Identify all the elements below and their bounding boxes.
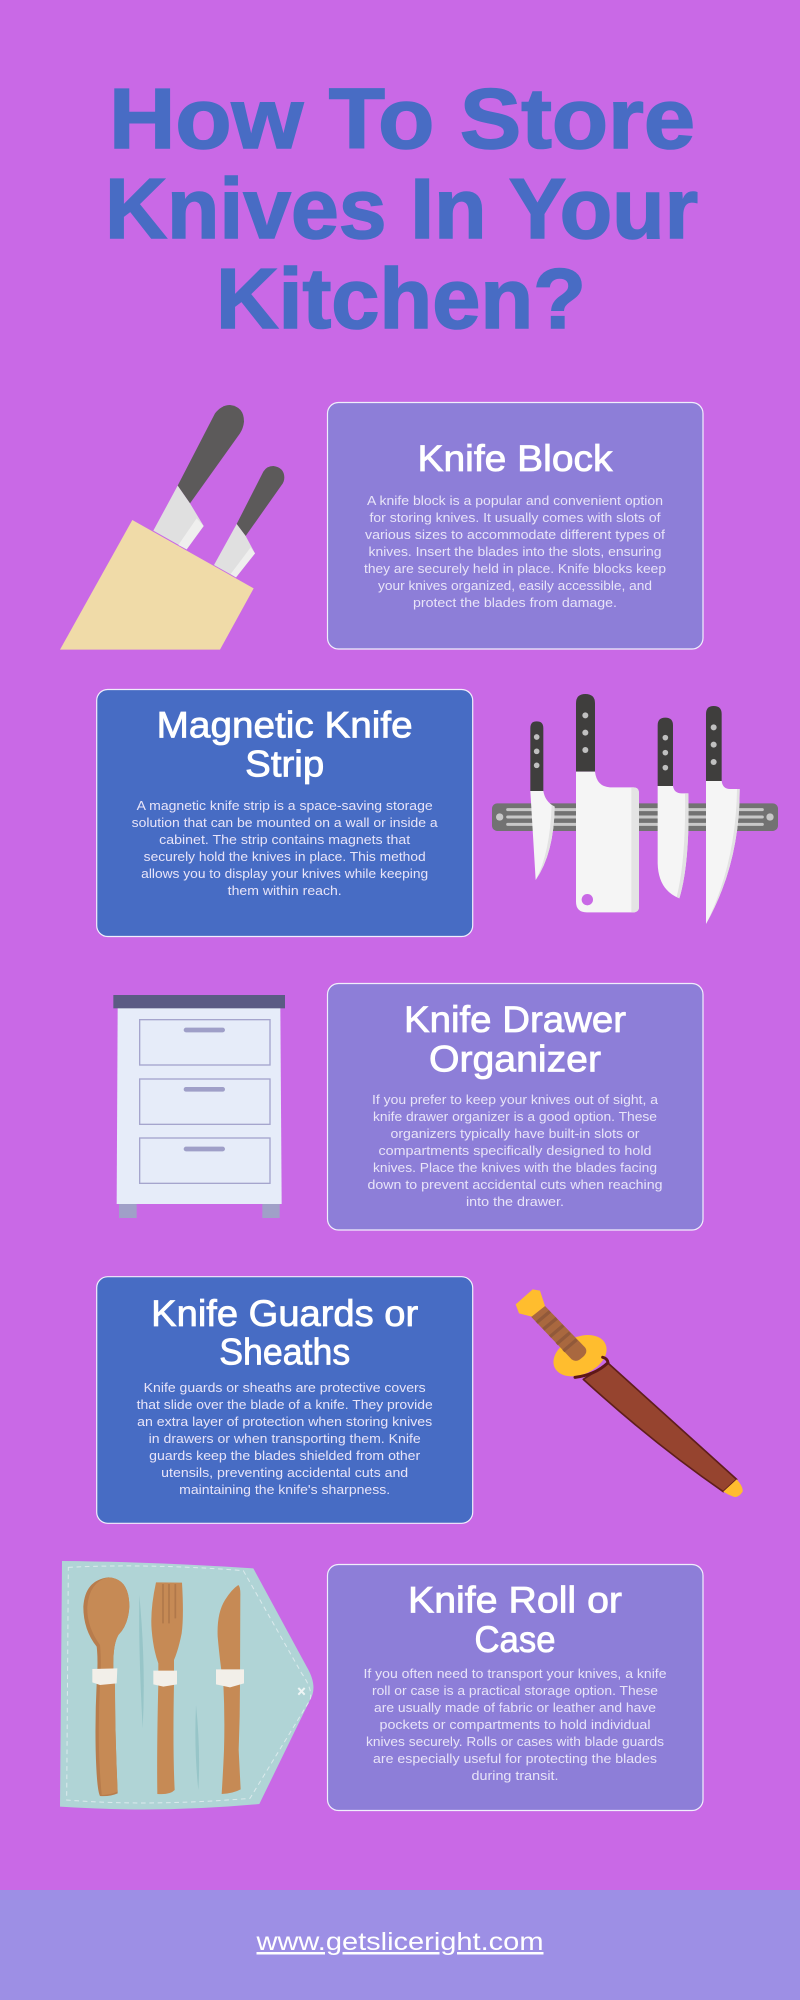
title: Kitchen? [216,252,586,347]
panel: knife guards or sheaths [97,1277,473,1523]
heading: knife block: Knife Block [418,438,613,479]
heading: knife roll or case: Case [474,1619,556,1660]
text: knife roll or case: pockets or compartments to hold individual [380,1717,651,1732]
text: magnetic knife strip: securely hold the knives in place. This method [144,849,426,864]
title: Knives In Your [105,162,698,257]
text: knife drawer organizer: into the drawer. [466,1194,564,1209]
heading: knife roll or case: Knife Roll or [408,1580,622,1621]
footer link: www.getsliceright.com [255,1928,543,1956]
text: knife guards or sheaths [137,1380,433,1497]
text: knife roll or case: are especially useful for protecting the blades [373,1751,658,1766]
text: knife block: various sizes to accommodate different types of [365,527,665,542]
text: knife drawer organizer: If you prefer to keep your knives out of sight, a [372,1092,659,1107]
text: magnetic knife strip [132,798,439,898]
heading: knife guards or sheaths: Sheaths [219,1332,350,1373]
text: magnetic knife strip: cabinet. The strip contains magnets that [159,832,411,847]
text: knife guards or sheaths: utensils, preventing accidental cuts and [161,1465,408,1480]
text: knife roll or case [364,1666,666,1783]
title: How To Store [109,72,695,167]
title [105,72,698,347]
text: magnetic knife strip: solution that can be mounted on a wall or inside a [132,815,439,830]
panel: knife roll or case [328,1564,703,1810]
icon: knife block [60,405,284,650]
text: knife roll or case: roll or case is a practical storage option. These [372,1683,658,1698]
text: knife drawer organizer: compartments specifically designed to hold [378,1143,652,1158]
text: knife drawer organizer: knife drawer organizer is a good option. These [373,1109,657,1124]
footer band [0,1890,800,2000]
text: knife block: for storing knives. It usually comes with slots of [370,510,661,525]
icon: sheathed dagger [516,1289,743,1497]
text: knife block: your knives organized, easily accessible, and [378,578,652,593]
text: magnetic knife strip: them within reach. [228,883,342,898]
icon: magnetic strip with knives [492,694,778,924]
text: knife roll or case: during transit. [472,1768,558,1783]
text: knife roll or case: are usually made of fabric or leather and have [374,1700,656,1715]
text: knife drawer organizer: organizers typically have built-in slots or [390,1126,640,1141]
text: knife guards or sheaths: an extra layer of protection when storing knives [137,1414,433,1429]
text: knife block [364,493,666,610]
text: knife guards or sheaths: in drawers or when transporting them. Knife [149,1431,421,1446]
text: knife roll or case: knives securely. Rolls or cases with blade guards [366,1734,665,1749]
icon: drawer cabinet [113,995,285,1218]
text: magnetic knife strip: allows you to display your knives while keeping [141,866,428,881]
text: magnetic knife strip: A magnetic knife strip is a space-saving storage [137,798,433,813]
heading: magnetic knife strip: Magnetic Knife [157,705,413,746]
text: knife drawer organizer [368,1092,662,1209]
text: knife block: they are securely held in place. Knife blocks keep [364,561,666,576]
text: knife guards or sheaths: Knife guards or sheaths are protective covers [144,1380,426,1395]
heading: knife drawer organizer: Organizer [429,1038,601,1079]
panel: knife block [328,402,703,649]
text: knife block: protect the blades from damage. [413,595,617,610]
text: knife block: knives. Insert the blades into the slots, ensuring [368,544,662,559]
text: knife guards or sheaths: that slide over the blade of a knife. They provide [137,1397,433,1412]
text: knife drawer organizer: down to prevent accidental cuts when reaching [368,1177,662,1192]
heading: knife guards or sheaths: Knife Guards or [151,1293,418,1334]
text: knife guards or sheaths: maintaining the knife's sharpness. [179,1482,390,1497]
panel: knife drawer organizer [328,984,703,1230]
text: knife drawer organizer: knives. Place the knives with the blades facing [373,1160,657,1175]
panel: magnetic knife strip [97,690,473,936]
heading: knife guards or sheaths [151,1293,418,1373]
text: knife block: A knife block is a popular and convenient option [367,493,663,508]
icon: utensil roll [60,1561,313,1809]
heading: magnetic knife strip: Strip [245,744,324,785]
heading: knife roll or case [408,1580,622,1660]
heading: knife drawer organizer [404,999,626,1079]
text: knife guards or sheaths: guards keep the blades shielded from other [149,1448,421,1463]
heading: magnetic knife strip [157,705,413,785]
heading: knife drawer organizer: Knife Drawer [404,999,626,1040]
text: knife roll or case: If you often need to transport your knives, a knife [364,1666,666,1681]
